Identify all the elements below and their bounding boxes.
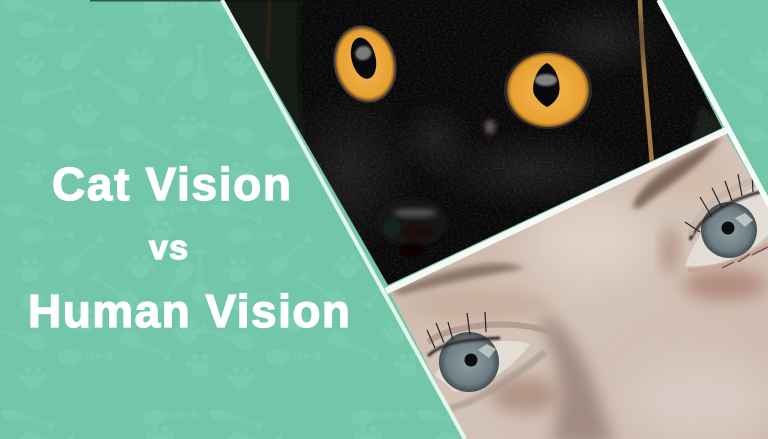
heading: Cat Vision: Cat Vision <box>52 158 291 210</box>
right eye with under-eye redness <box>683 172 768 301</box>
cat right eye <box>504 51 592 129</box>
divider: white strip between photos <box>386 130 727 291</box>
title <box>28 158 350 337</box>
background: dark green behind cat <box>224 0 306 142</box>
divider: white strip left of photos <box>222 0 465 439</box>
eyebrows <box>392 136 722 295</box>
left eye with under-eye redness <box>427 312 559 413</box>
heading: Human Vision: Human Vision <box>28 285 350 337</box>
photo: black cat close-up <box>215 0 730 295</box>
heading: vs: vs <box>149 229 188 267</box>
cat fur highlights <box>280 0 730 295</box>
background stick <box>640 0 652 165</box>
cat nose <box>376 198 448 257</box>
face shading <box>410 153 768 439</box>
photo: human face close-up <box>380 130 768 439</box>
divider: white strip right of photos <box>659 0 768 206</box>
cat left eye <box>334 25 396 103</box>
